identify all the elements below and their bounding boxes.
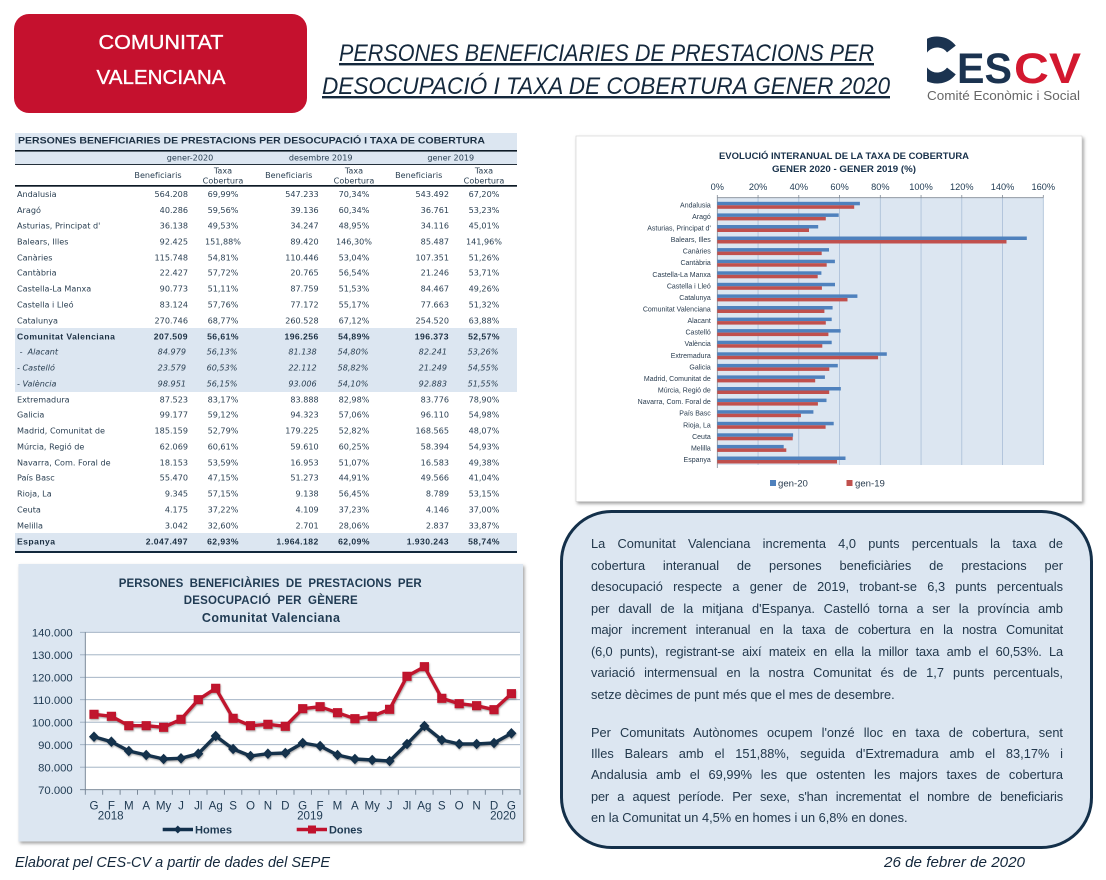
column headers: desembre 2019 [289,152,353,162]
rows: 16.583 [421,457,449,467]
paragraph 1: cobertura interanual de persones beneficiàries de prestacions per [591,558,1063,572]
rows: 54,10% [338,378,368,388]
rows: 54,98% [469,410,500,420]
bars and category labels: Múrcia, Regió de [658,388,711,394]
rows: 69,99% [208,189,239,199]
paragraph 1: variació intermensual en la nostra Comunitat és de 1,7 punts percentuals, [591,665,1063,680]
rows: 547.233 [285,189,319,199]
rows: 34.116 [421,220,449,230]
column headers: Beneficiaris [265,170,312,180]
x axis labels: S [229,800,237,813]
rows: 85.487 [421,237,449,247]
rows: 21.246 [421,268,449,278]
rows: 22.112 [288,362,317,372]
rows: 87.759 [290,283,319,293]
rows: 87.523 [160,394,188,404]
x axis labels: G [298,800,307,813]
bars and category labels: País Basc [679,411,711,418]
rows: Comunitat Valenciana [17,332,115,342]
logo: CES CV: Comité Econòmic i Social [927,88,1080,103]
x axis labels: M [333,800,342,813]
rows: 77.172 [290,299,319,309]
rows: 62,09% [338,536,370,546]
column headers: Taxa [474,166,493,176]
x axis labels: Jl [194,800,202,813]
top axis labels: 140% [991,182,1014,192]
x axis labels: F [108,800,115,813]
rows: - Alacant [17,346,59,356]
data table [15,133,517,553]
rows: 82,98% [339,394,370,404]
x axis labels: N [264,800,272,813]
panel: bar chart of coverage rate [576,136,1082,502]
line chart title: Comunitat Valenciana [202,611,341,625]
line chart legend: Homes [195,824,232,836]
bars and category labels: Ceuta [692,434,711,441]
x axis labels: My [156,800,172,813]
bars and category labels: Navarra, Com. Foral de [638,399,711,406]
rows: 81.138 [288,346,317,356]
y axis labels: 80.000 [38,762,73,774]
rows: 98.951 [158,378,186,388]
bars and category labels: Rioja, La [683,422,711,429]
rows: 57,76% [208,299,239,309]
x axis labels: A [351,800,359,813]
rows: 45,01% [469,220,500,230]
column headers: Beneficiaris [134,170,182,180]
x axis labels: J [387,800,392,813]
x axis labels: N [472,800,481,813]
x axis labels: F [317,800,324,813]
badge: Comunitat Valenciana: COMUNITAT [98,32,224,54]
column headers [134,152,504,186]
rows: 21.249 [419,362,447,372]
rows: 4.146 [426,504,449,514]
column headers: Cobertura [334,176,374,186]
rows: 110.446 [285,252,319,262]
logo: CES CV: CV [1014,45,1081,93]
rows: Cantàbria [17,268,57,278]
rows: 62,93% [207,536,239,546]
rows: 196.256 [284,332,319,342]
rows: 33,87% [469,520,500,530]
rows: 3.042 [165,520,188,530]
logo: CES CV [919,42,1081,103]
rows: 564.208 [155,189,188,199]
rows: 83.776 [421,394,449,404]
rows: 54,80% [338,346,368,356]
top axis labels: 0% [711,182,724,192]
y axis labels: 100.000 [32,717,73,729]
rows: 37,23% [339,504,370,514]
rows: Andalusia [17,189,57,199]
rows: 83.888 [290,394,319,404]
rows: Extremadura [17,394,70,404]
column headers: gener-2020 [167,152,213,162]
rows: 32,60% [208,520,239,530]
rows: 93.006 [288,378,317,388]
top axis labels [711,182,1055,192]
rows: 57,15% [208,488,239,498]
rows: 37,00% [469,504,500,514]
rows: 59,12% [208,410,239,420]
bar chart title: EVOLUCIÓ INTERANUAL DE LA TAXA DE COBERTURA [719,150,969,162]
y axis labels: 130.000 [32,650,73,662]
rows: 270.746 [155,315,188,325]
rows: 60,53% [207,362,237,372]
bar chart legend [770,478,885,490]
rows: 53,04% [339,252,370,262]
title: PERSONES BENEFICIARIES DE PRESTACIONS PER [339,40,874,67]
rows: Aragó [17,205,41,215]
rows: 49.566 [421,473,449,483]
rows: 2.047.497 [146,536,188,546]
rows: 44,91% [339,473,370,483]
rows: 34.247 [290,220,319,230]
rows: Castella-La Manxa [17,283,91,293]
rows: 54,89% [338,332,370,342]
rows: Catalunya [17,315,58,325]
footer: date: 26 de febrer de 2020 [883,854,1026,871]
rows: 48,95% [339,220,370,230]
paragraph 1: setze dècimes de punt més que el mes de desembre. [591,687,895,702]
rows: 53,23% [469,205,500,215]
rows: 49,38% [469,457,500,467]
paragraph 1: (6,0 punts), registrant-se així mateix en ella la millor taxa amb el 60,53%. La [591,644,1063,658]
rows: 52,82% [339,425,370,435]
rows: 51.273 [290,473,319,483]
rows: 68,77% [208,315,239,325]
title: DESOCUPACIÓ I TAXA DE COBERTURA GENER 2020 [322,73,891,100]
rows: 96.110 [421,410,449,420]
rows: 53,59% [208,457,239,467]
rows: 67,20% [469,189,500,199]
rows: 92.883 [419,378,447,388]
paragraph 2: per a aquest període. Per sexe, s'han incrementat el nombre de beneficiaris [591,788,1063,804]
rows: 56,13% [207,346,237,356]
rows: 107.351 [416,252,449,262]
bar chart title [719,150,969,175]
bars and category labels: Alacant [687,318,711,325]
bars and category labels: Espanya [684,457,711,464]
x axis labels: J [178,800,184,813]
rows: 2.701 [296,520,319,530]
rows: 51,07% [339,457,370,467]
bar chart legend: gen-19 [855,478,885,490]
rows: 67,12% [339,315,370,325]
column headers: Taxa [344,166,363,176]
rows: 58,74% [468,536,500,546]
line chart title [119,577,422,625]
column headers: gener 2019 [427,152,474,162]
y axis labels: 140.000 [32,627,73,639]
top axis labels: 100% [909,182,933,192]
rows: 168.565 [416,425,449,435]
rows: 78,90% [469,394,500,404]
bars and category labels: Madrid, Comunitat de [644,376,711,383]
paragraph 2 [591,724,1063,824]
rows: 54,93% [469,441,500,451]
rows: 9.345 [165,488,188,498]
rows: 59.610 [290,441,319,451]
x axis labels: D [281,800,289,813]
x axis labels: M [124,800,134,813]
rows: 2.837 [426,520,449,530]
rows: 84.467 [421,283,449,293]
rows: 254.520 [416,315,449,325]
rows: 37,22% [208,504,239,514]
rows: Madrid, Comunitat de [17,425,105,435]
line series: Homes [90,721,516,766]
rows: Galicia [17,410,44,420]
rows: 16.953 [290,457,319,467]
bars and category labels [638,202,1027,464]
rows: 53,71% [469,268,500,278]
rows: 23.579 [158,362,186,372]
top axis labels: 40% [790,182,808,192]
rows: 179.225 [285,425,319,435]
bar chart title: GENER 2020 - GENER 2019 (%) [772,164,916,175]
rows: 51,26% [469,252,500,262]
rows: 39.136 [290,205,319,215]
rows: Múrcia, Regió de [17,441,84,451]
rows: 141,96% [466,237,502,247]
rows: 56,61% [207,332,239,342]
rows: 70,34% [339,189,370,199]
rows: 90.773 [160,283,188,293]
rows: 55,17% [339,299,370,309]
rows: 1.964.182 [276,536,319,546]
rows: 99.177 [160,410,188,420]
rows: 63,88% [469,315,500,325]
rows [17,189,502,546]
rows: 20.765 [290,268,319,278]
rows: 92.425 [160,237,188,247]
plot background and gridlines [717,195,1043,468]
y axis labels: 110.000 [33,695,73,707]
rows: 115.748 [155,252,188,262]
rows: 47,15% [208,473,239,483]
rows: 146,30% [336,237,372,247]
x axis labels: Ag [209,800,223,813]
rows: 4.109 [296,504,319,514]
x axis labels: Jl [403,800,411,813]
rows: 62.069 [160,441,188,451]
logo: CES CV: ES [957,45,1012,93]
rows: Melilla [17,520,43,530]
rows: Rioja, La [17,488,52,498]
table title: PERSONES BENEFICIARIES DE PRESTACIONS PER DESOCUPACIÓ I TAXA DE COBERTURA [18,134,485,146]
top axis labels: 60% [830,182,849,192]
bars and category labels: Asturias, Principat d' [647,226,711,232]
bar chart legend: gen-20 [778,478,808,490]
rows: 51,11% [208,283,239,293]
top axis labels: 120% [950,182,974,192]
rows: 543.492 [416,189,449,199]
rows: Espanya [17,536,56,546]
rows: 56,45% [339,488,370,498]
rows: 151,88% [205,237,241,247]
x axis labels: 2018 [98,810,124,823]
x axis labels: Ag [417,800,431,813]
rows: 94.323 [290,410,319,420]
bars and category labels: Melilla [691,445,711,452]
bars and category labels: Balears, Illes [671,237,711,244]
rows: 18.153 [160,457,188,467]
line series: Dones [90,663,515,731]
rows: 53,26% [468,346,498,356]
rows: 36.138 [160,220,188,230]
rows: 207.509 [154,332,188,342]
bars and category labels: Galicia [689,364,711,371]
bars and category labels: Castelló [686,330,711,337]
rows: 40.286 [160,205,188,215]
panel: summary background [562,512,1092,848]
line chart legend [163,824,362,836]
rows: Balears, Illes [17,237,68,247]
rows: 8.789 [426,488,449,498]
y axis labels: 70.000 [38,785,73,797]
badge: Comunitat Valenciana [14,14,307,113]
rows: 89.420 [290,237,319,247]
rows: 41,04% [469,473,500,483]
plot area and gridlines [80,632,520,795]
column headers: Cobertura [203,176,243,186]
line chart title: PERSONES BENEFICIÀRIES DE PRESTACIONS PER [119,577,422,590]
footer: source: Elaborat pel CES-CV a partir de dades del SEPE [15,854,331,871]
badge: Comunitat Valenciana: VALENCIANA [96,67,226,89]
rows: 59,56% [208,205,239,215]
title [322,40,891,100]
x axis labels: My [364,800,380,813]
rows: 83.124 [160,299,188,309]
rows: 57,72% [208,268,239,278]
table header bands [15,133,517,553]
rows: 84.979 [158,346,186,356]
bars and category labels: Andalusia [680,202,711,209]
x axis labels: 2020 [490,810,516,823]
rows: 58.394 [421,441,449,451]
paragraph 2: en la Comunitat un 4,5% en homes i un 6,8% en dones. [591,810,908,824]
rows: 52,79% [208,425,239,435]
rows: 57,06% [339,410,370,420]
rows: 83,17% [208,394,239,404]
paragraph 1: per davall de la mitjana d'Espanya. Castelló torna a ser la província amb [591,600,1063,616]
top axis labels: 80% [871,182,889,192]
rows: 58,82% [338,362,368,372]
rows: 49,26% [469,283,500,293]
rows: 56,54% [339,268,370,278]
rows: 60,34% [339,205,370,215]
rows: 260.528 [285,315,319,325]
line chart legend: Dones [329,824,362,836]
rows: Navarra, Com. Foral de [17,457,111,467]
paragraph 2: Per Comunitats Autònomes ocupem l'onzé lloc en taxa de cobertura, sent [591,724,1063,740]
bars and category labels: Canàries [683,249,711,256]
y axis labels [32,627,73,797]
line chart title: DESOCUPACIÓ PER GÈNERE [184,594,358,607]
rows: 52,57% [468,332,500,342]
rows: 28,06% [339,520,370,530]
y axis labels: 120.000 [32,672,73,684]
x axis labels: G [507,800,516,813]
rows: - València [17,378,57,388]
rows: 53,15% [469,488,500,498]
x axis labels: 2019 [297,810,323,823]
rows: Castella i Lleó [17,299,74,309]
rows: 196.373 [415,332,449,342]
rows: Asturias, Principat d' [17,220,100,230]
rows: 48,07% [469,425,500,435]
rows: Ceuta [17,504,41,514]
paragraph 1: desocupació respecte a gener de 2019, trobant-se 6,3 punts percentuals [591,579,1063,594]
column headers: Cobertura [464,176,504,186]
bars and category labels: Cantàbria [680,260,711,267]
rows: 77.663 [421,299,449,309]
top axis labels: 160% [1032,182,1055,192]
rows: - Castelló [17,362,55,372]
bars and category labels: Catalunya [679,295,711,302]
rows: 56,15% [207,378,237,388]
paragraph 2: Illes Balears amb el 151,88%, seguida d'Extremadura amb el 83,17% i [591,746,1063,760]
x axis labels: S [438,800,446,813]
rows: 54,55% [468,362,498,372]
rows: 51,55% [468,378,498,388]
bars and category labels: Aragó [692,214,711,221]
rows: 60,25% [339,441,370,451]
x axis labels: A [142,800,150,813]
x axis labels: G [89,800,99,813]
rows: 55.470 [160,473,188,483]
paragraph 2: Andalusia amb el 69,99% les que ostenten les majors taxes de cobertura [591,767,1063,782]
rows: 60,61% [208,441,239,451]
column headers: Beneficiaris [395,170,442,180]
top axis labels: 20% [749,182,767,192]
bars and category labels: Castella i Lleó [667,283,711,290]
rows: 51,53% [339,283,370,293]
rows: 185.159 [155,425,188,435]
rows: 9.138 [296,488,319,498]
rows: 4.175 [165,504,188,514]
bars and category labels: València [684,341,711,348]
rows: 1.930.243 [407,536,449,546]
rows: 36.761 [421,205,449,215]
x axis labels: O [455,800,464,813]
paragraph 1: major increment interanual en la taxa de cobertura en la nostra Comunitat [591,622,1063,637]
x axis labels: O [246,800,255,813]
rows: 51,32% [469,299,500,309]
rows: País Basc [17,473,55,483]
rows: 82.241 [419,346,447,356]
rows: Canàries [17,252,52,262]
bars and category labels: Extremadura [671,353,711,360]
paragraph 1: La Comunitat Valenciana incrementa 4,0 punts percentuals la taxa de [591,536,1063,551]
rows: 22.427 [160,268,188,278]
y axis labels: 90.000 [38,740,73,752]
x axis labels: D [490,800,498,813]
column headers: Taxa [213,166,232,176]
x axis labels [89,800,516,823]
rows: 49,53% [208,220,239,230]
panel: line chart by gender [18,564,523,842]
bars and category labels: Comunitat Valenciana [643,306,711,314]
bars and category labels: Castella-La Manxa [652,272,711,279]
rows: 54,81% [208,252,239,262]
